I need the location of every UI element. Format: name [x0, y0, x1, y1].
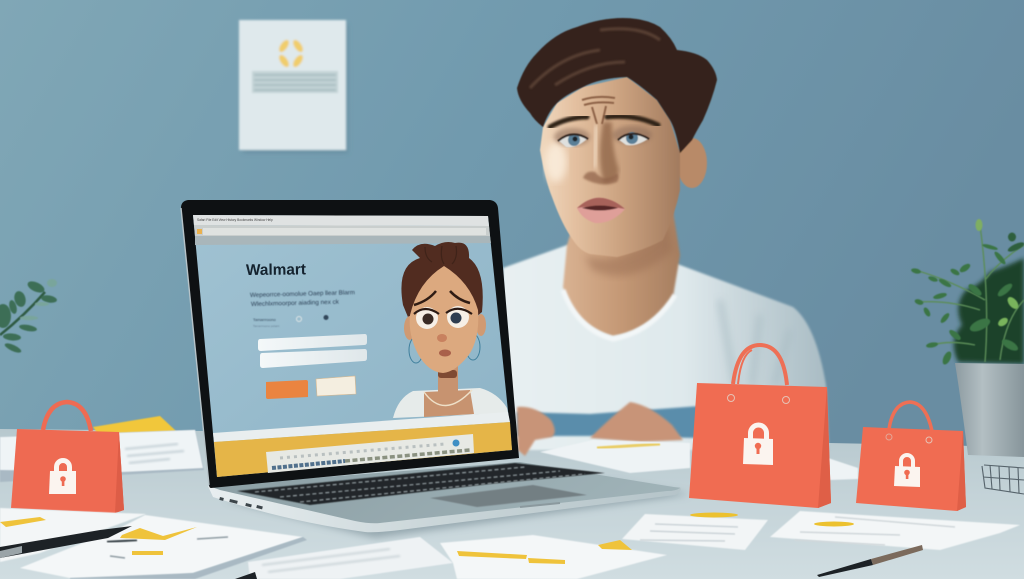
base front edge — [208, 486, 681, 532]
nose — [437, 334, 447, 342]
pen — [0, 526, 132, 558]
ear — [677, 138, 707, 188]
latch — [520, 503, 560, 507]
face — [410, 266, 478, 373]
large paper text — [795, 517, 955, 545]
white strip — [213, 412, 510, 442]
right plant — [911, 219, 1024, 366]
face — [540, 77, 680, 257]
paper three — [248, 537, 453, 579]
right eye — [446, 306, 472, 328]
paper text — [125, 444, 184, 463]
yellow highlight — [597, 444, 660, 448]
left plant — [0, 279, 57, 355]
body text: Wlechlxmoorpor aiading nex ck — [251, 299, 340, 308]
keyboard — [237, 463, 605, 505]
bag rings — [728, 394, 734, 402]
eye sockets shadow — [554, 126, 652, 146]
right eyebrow — [607, 116, 658, 125]
laptop — [181, 200, 690, 538]
choker — [438, 370, 457, 378]
forehead wrinkles — [582, 97, 615, 124]
foliage mass — [954, 258, 1024, 364]
metal pot — [955, 363, 1024, 457]
yellow folder — [93, 416, 176, 437]
orange button — [266, 380, 308, 399]
top paper — [0, 430, 203, 472]
small paper behind bags — [828, 458, 858, 480]
foreground papers left — [0, 508, 667, 579]
yellow footer — [214, 422, 512, 477]
paper two text — [110, 537, 228, 558]
neck — [438, 360, 458, 394]
yellow marks — [457, 551, 527, 559]
cream button — [316, 376, 356, 396]
collar — [563, 290, 675, 339]
shopping bag: left — [11, 402, 124, 513]
poster on wall — [239, 20, 348, 153]
paper four — [440, 535, 667, 579]
dock icons — [272, 461, 345, 468]
status row: Tamarrroono polarrt — [253, 324, 280, 328]
paper stack — [0, 430, 204, 482]
earrings — [409, 337, 423, 363]
ports — [219, 497, 263, 509]
hair back — [401, 242, 483, 322]
right hand — [590, 402, 683, 442]
light leaves — [996, 295, 1021, 328]
hair — [517, 18, 717, 153]
left eye — [558, 134, 588, 147]
nose highlight — [594, 125, 597, 168]
neck shadow — [585, 222, 673, 276]
lid frame — [181, 200, 519, 488]
page background — [193, 215, 512, 477]
shopping bag: small — [856, 402, 966, 511]
laptop shadow — [225, 480, 690, 538]
walmart heading: Walmart — [246, 261, 306, 279]
mouth — [577, 198, 625, 223]
browser lower strip — [195, 236, 491, 245]
lock icon — [49, 458, 76, 494]
yellow mark — [690, 512, 738, 518]
lock icon — [743, 422, 773, 465]
bun strands — [425, 246, 456, 264]
desk surface — [0, 429, 1024, 579]
left papers and folder — [0, 416, 204, 482]
hair highlights — [530, 29, 660, 88]
ears — [404, 316, 416, 340]
leaves — [911, 219, 1024, 366]
shirt shadow folds — [720, 300, 790, 385]
left eyebrow — [550, 117, 587, 127]
favicon — [197, 229, 202, 234]
paper one — [0, 508, 146, 562]
poster logo — [277, 38, 305, 69]
pen tip — [235, 572, 257, 579]
status row — [253, 315, 328, 328]
browser address bar — [194, 225, 490, 236]
person — [503, 18, 829, 456]
menu bar — [193, 215, 489, 226]
menu items: Safari File Edit View History Bookmarks Window Help — [197, 218, 273, 222]
keyhole — [60, 476, 66, 486]
shirt blue band — [517, 406, 700, 438]
wall background — [0, 0, 1024, 450]
neck — [563, 205, 680, 336]
body text — [250, 289, 355, 308]
left brow — [414, 291, 436, 305]
screen — [193, 215, 512, 477]
status row: Tamarrroono — [253, 317, 276, 322]
laptop base — [209, 462, 680, 523]
cartoon woman — [393, 242, 508, 418]
poster text lines — [252, 71, 338, 93]
bag rings — [886, 434, 892, 440]
stems — [915, 225, 1024, 362]
mouth — [439, 350, 451, 356]
second pen line — [107, 540, 137, 542]
keyhole — [755, 443, 761, 454]
nose shadow — [600, 122, 619, 183]
pen — [817, 545, 923, 577]
input field two — [260, 349, 367, 368]
body text: Wepeorrce-oomolue Oaep llear Blarm — [250, 289, 355, 299]
input field one — [258, 334, 367, 351]
small paper — [622, 514, 768, 550]
t-shirt — [503, 245, 829, 450]
address field — [203, 228, 486, 235]
chest — [424, 390, 474, 417]
small paper text — [640, 524, 738, 541]
paper two — [20, 515, 303, 578]
yellow mark — [0, 517, 46, 527]
keyhole — [904, 470, 910, 479]
left hand — [517, 407, 555, 456]
nose tip and nostrils — [583, 172, 618, 184]
yellow marks — [120, 527, 197, 540]
trackpad — [430, 485, 587, 507]
lid silver edge — [181, 208, 209, 485]
wire basket — [982, 465, 1024, 494]
keys — [255, 467, 585, 502]
right brow — [450, 291, 470, 303]
right eye — [618, 132, 649, 145]
left eye — [414, 307, 439, 329]
paper behind laptop — [540, 440, 858, 480]
lock icon — [894, 453, 920, 487]
large paper — [770, 511, 1020, 550]
shopping bag: large — [689, 345, 831, 508]
app dock — [266, 434, 474, 473]
foreground papers right — [622, 511, 1020, 577]
shirt — [393, 388, 508, 418]
necklace — [424, 390, 472, 406]
cheek highlight — [545, 142, 567, 182]
yellow mark — [814, 522, 854, 526]
